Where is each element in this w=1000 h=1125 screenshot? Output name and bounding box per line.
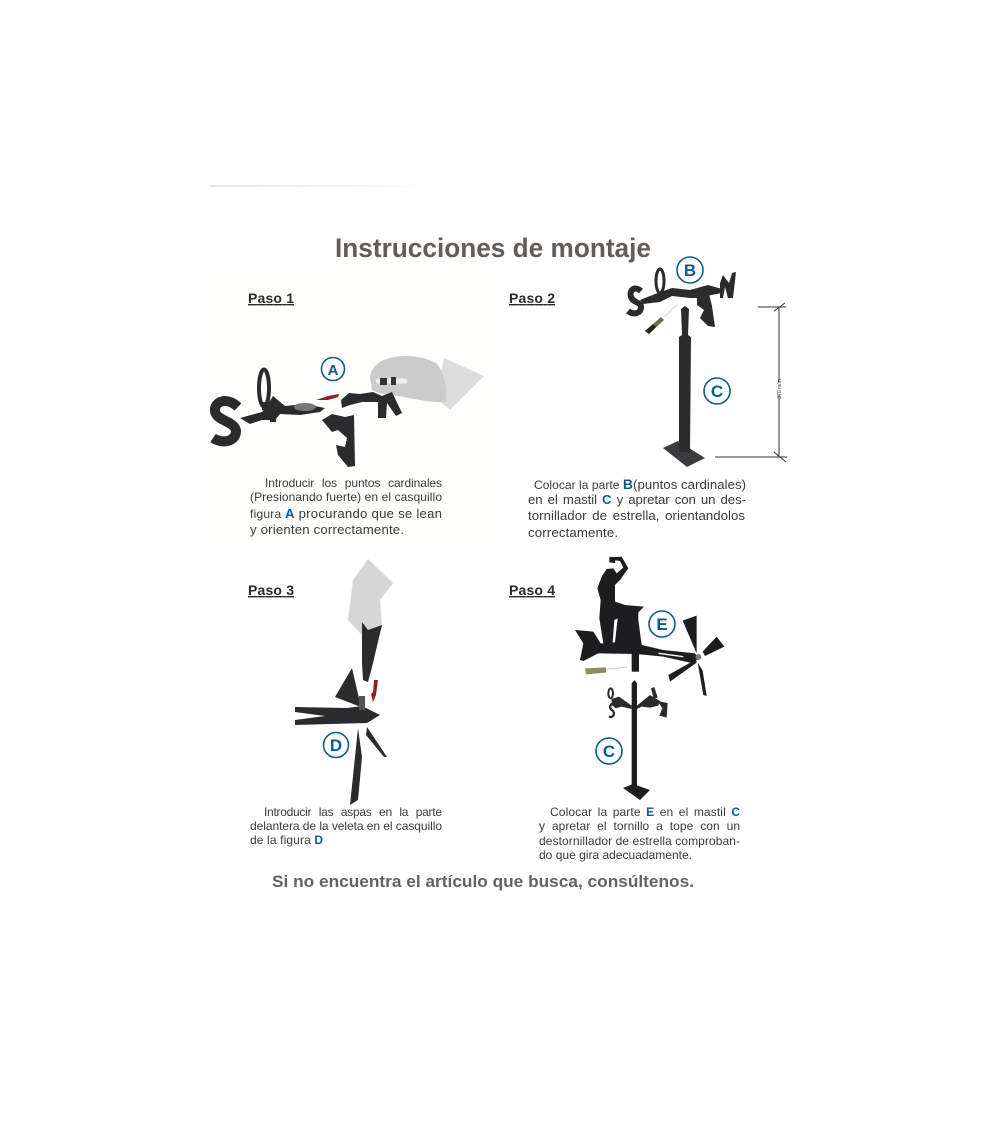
illustration: inserting blades [295,559,393,805]
text block: paso 1: Introducir los puntos cardinales [265,476,442,490]
text block: paso 4: y apretar el tornillo a tope con un [539,819,740,833]
text block: paso 2: tornillador de estrella, orientandolos [528,508,745,523]
callout: D: D [330,736,342,755]
callout: C [596,738,622,764]
callout: A [322,358,344,380]
callout: E: E [656,615,668,634]
illustration: cardinal points inserted by hand [213,356,484,467]
text block: paso 4 [539,805,740,862]
icon: cardinal points [628,269,736,327]
callout: B [677,257,703,283]
heading: paso 1: Paso 1 [248,290,294,306]
panel: paso 4 [509,557,740,862]
text block: paso 3: Introducir las aspas en la parte [264,805,442,819]
icon: cardinal S [213,401,238,441]
callout: A: A [328,362,339,379]
panel: paso 1 [213,290,484,537]
text block: paso 3: delantera de la veleta en el casquillo [250,819,442,833]
text block: paso 3: de la figura D [250,833,323,847]
heading: paso 2: Paso 2 [509,290,555,306]
icon: cardinal O [259,370,269,406]
icon: mast [679,306,691,452]
icon: cardinal N arm [341,392,402,418]
callout: C: C [711,382,723,401]
icon: screwdriver [645,305,677,334]
text block: paso 2: correctamente. [528,525,618,540]
icon: screwdriver [585,667,627,674]
callout: C [704,378,730,404]
text block: paso 2 [528,476,746,540]
text block: paso 2: Colocar la parte B(puntos cardinales) [534,476,746,492]
dimension: 370 m/m [715,303,787,462]
callout: D [324,732,348,758]
heading: paso 3: Paso 3 [248,582,294,598]
callout: B: B [684,261,696,280]
icon: vane body [295,668,387,805]
icon: red arrow [316,394,339,400]
text block: paso 1: (Presionando fuerte) en el casquillo [250,490,442,504]
text block: paso 1 [250,476,442,537]
title: Instrucciones de montaje [335,233,651,263]
text block: paso 4: do que gira adecuadamente. [539,848,692,862]
text block: paso 1: y orienten correctamente. [250,522,404,537]
illustration: blacksmith weathervane on mast [575,557,724,800]
footer note: Si no encuentra el artículo que busca, consúltenos. [272,873,694,891]
callout: E [649,611,675,637]
icon: red arrow [371,680,378,702]
icon: hand [348,559,393,647]
icon: cardinal points and mast [608,680,668,790]
text block: paso 2: en el mastil C y apretar con un des- [528,492,746,507]
text block: paso 3 [250,805,442,847]
text block: paso 1: figura A procurando que se lean [250,506,442,521]
illustration: mast with cardinal points [628,269,787,467]
icon: base plate [623,784,650,800]
heading: paso 4: Paso 4 [509,582,555,598]
icon: blacksmith vane [575,557,724,696]
text block: paso 4: Colocar la parte E en el mastil C [550,805,740,819]
dimension: 370 m/m: 370 m/m [777,379,783,399]
panel: paso 3 [248,559,442,847]
callout: C: C [603,742,615,761]
icon: base plate [663,441,705,467]
icon: central arm [240,396,325,424]
icon: hand [370,356,484,410]
text block: paso 4: destornillador de estrella comproban- [539,834,740,848]
icon: blade held [362,622,382,682]
panel: paso 2 [509,257,787,540]
icon: cardinal E [322,414,355,467]
